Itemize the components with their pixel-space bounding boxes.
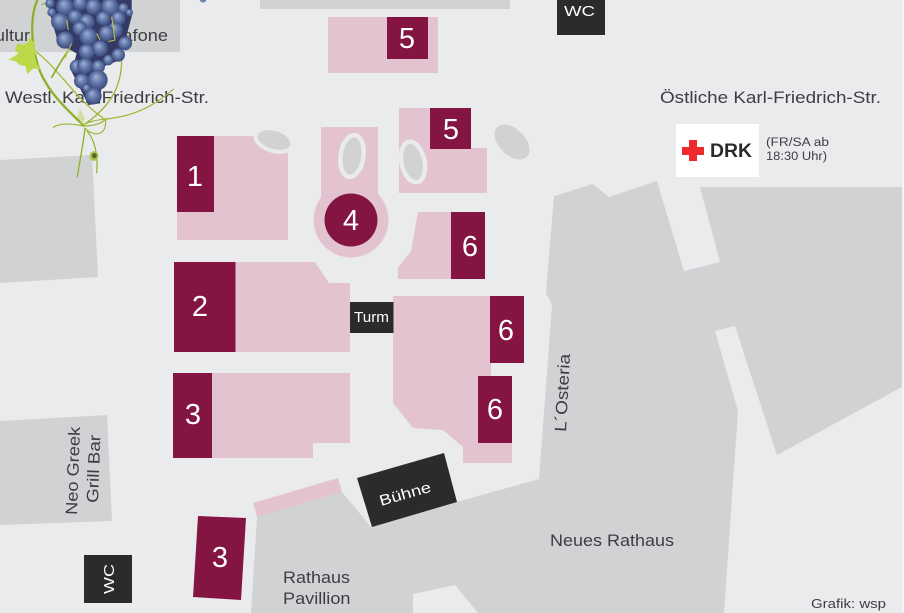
label box: Turm: Turm (354, 310, 389, 326)
label: L´Osteria: L´Osteria (552, 352, 574, 432)
label: Östliche Karl-Friedrich-Str.: Östliche Karl-Friedrich-Str. (660, 89, 881, 107)
zone 6 upper: 6 (462, 231, 478, 263)
zone 1 (177, 136, 288, 240)
pink strip at Pavillion (253, 478, 342, 517)
label box: WC bottom: WC (101, 564, 118, 594)
label box: WC top (557, 0, 605, 35)
label: Westl. Karl-Friedrich-Str.: Westl. Karl-Friedrich-Str. (5, 89, 209, 107)
icon: grape vine (8, 0, 173, 177)
zone 3 (173, 373, 350, 458)
zone 3 lower: 3 (212, 542, 228, 574)
zone 4: 4 (343, 205, 359, 237)
fountain right of zone 5 (488, 118, 536, 166)
label: Neo Greek Grill Bar: Neo Greek (63, 426, 84, 515)
grape cluster (45, 0, 133, 105)
DRK note: 18:30 Uhr) (766, 151, 827, 163)
label: Rathaus Pavillion (283, 569, 350, 608)
small bud (90, 151, 98, 161)
zone 2 (174, 262, 350, 352)
building: top centre block (260, 0, 510, 9)
DRK note: (FR/SA ab (766, 137, 829, 149)
label: Vodafone: Vodafone (91, 27, 168, 45)
zone 4 (314, 127, 388, 258)
label box: Turm (350, 302, 394, 333)
zone 1: 1 (187, 161, 203, 193)
DRK logo (676, 124, 759, 177)
zone 6 large (393, 296, 524, 463)
zone 2: 2 (192, 291, 208, 323)
zone 3 lower (193, 516, 246, 600)
label: Rathaus Pavillion: Rathaus (283, 569, 350, 587)
building: Neo Greek Grill Bar block (0, 415, 112, 525)
small pale leaf (77, 108, 85, 124)
DRK note (766, 137, 829, 163)
label: Rathaus Pavillion: Pavillion (283, 590, 350, 608)
building: top left block (0, 0, 180, 52)
label box: WC bottom (84, 555, 132, 603)
label: Neo Greek Grill Bar (63, 426, 104, 515)
zone 5 top (328, 17, 438, 73)
zone 6 large: 6 (498, 315, 514, 347)
stray grape at top edge (200, 0, 206, 2)
leaf (8, 37, 41, 74)
label box: Bühne (357, 453, 457, 527)
label box: WC top: WC (564, 3, 595, 20)
vine stems (32, 0, 173, 177)
fountain near zone 1 (253, 124, 295, 156)
DRK logo: DRK (710, 141, 752, 162)
zone 3: 3 (185, 399, 201, 431)
label box: Bühne: Bühne (377, 479, 433, 510)
building: left block (0, 155, 98, 283)
label: Neues Rathaus: Neues Rathaus (550, 532, 674, 550)
zone 6 upper (398, 212, 485, 279)
zone 6 large: 6 (487, 394, 503, 426)
zone 5 middle (397, 108, 487, 193)
building: Neues Rathaus and Pavillion (251, 181, 902, 613)
credit: Grafik: wsp (811, 597, 886, 611)
zone 5 middle: 5 (443, 114, 459, 146)
label: Neo Greek Grill Bar: Grill Bar (84, 434, 104, 503)
zone 5 top: 5 (399, 23, 415, 55)
